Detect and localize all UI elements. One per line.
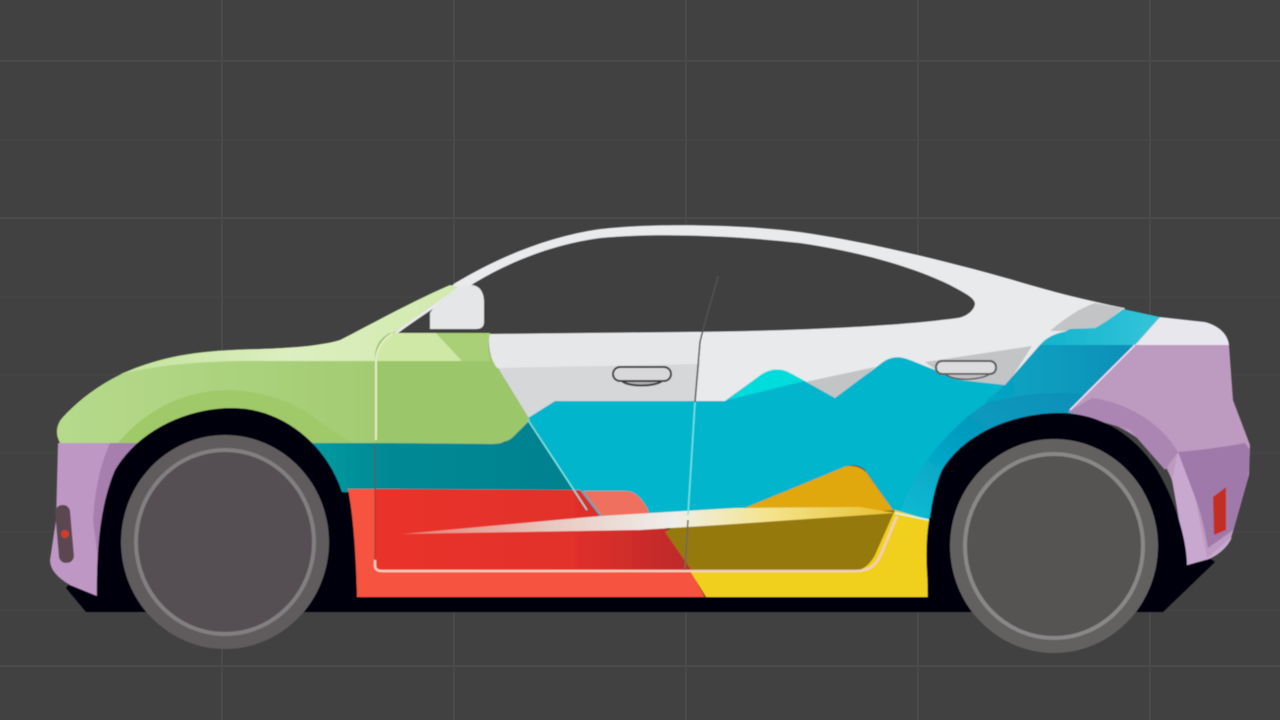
- front wheel: [121, 435, 329, 649]
- white rear deck: [1135, 317, 1229, 345]
- front door white: [489, 334, 702, 368]
- front purple bumper: [50, 443, 140, 596]
- dark gold door panel: [665, 510, 895, 571]
- front door lower grey panel: [497, 362, 700, 422]
- white body upper: [385, 225, 1125, 410]
- rear reflector: [1213, 487, 1226, 535]
- rear light strip: [1172, 452, 1232, 565]
- rear wheel arch: [927, 413, 1187, 612]
- white light streak: [402, 507, 895, 534]
- mirror: [430, 285, 484, 329]
- gold panel: [735, 466, 895, 525]
- door lines: [375, 276, 1135, 571]
- rear arch blue band: [900, 393, 1085, 518]
- teal band: [310, 418, 600, 500]
- rear grey panels: [805, 303, 1123, 400]
- bright cyan peak: [728, 370, 805, 400]
- rear door handle: [936, 361, 996, 379]
- rear dark purple panel: [1178, 443, 1250, 548]
- front arch shading: [118, 390, 352, 443]
- front lamp: [54, 504, 74, 563]
- pale red corner: [583, 491, 650, 520]
- red sill: [348, 489, 705, 597]
- rear purple quarter: [1068, 345, 1250, 565]
- side window: [398, 235, 975, 334]
- front bumper arch shade: [93, 443, 140, 560]
- rear cyan top band: [1040, 309, 1160, 345]
- hood and front fender: [57, 285, 450, 443]
- rear blue panel: [985, 345, 1135, 412]
- hood highlight: [120, 285, 458, 374]
- cyan main panel: [528, 328, 1098, 520]
- underbody shadow: [66, 480, 1215, 612]
- red door panel: [375, 489, 702, 571]
- front door green panel: [375, 333, 530, 444]
- rear arch band: [1068, 398, 1178, 470]
- door mid green: [436, 333, 490, 361]
- rear wheel: [950, 439, 1158, 653]
- front wheel arch: [97, 408, 357, 612]
- yellow rear lower: [690, 510, 930, 597]
- car: [50, 225, 1250, 653]
- door highlight: [377, 333, 462, 361]
- front door handle: [613, 367, 671, 386]
